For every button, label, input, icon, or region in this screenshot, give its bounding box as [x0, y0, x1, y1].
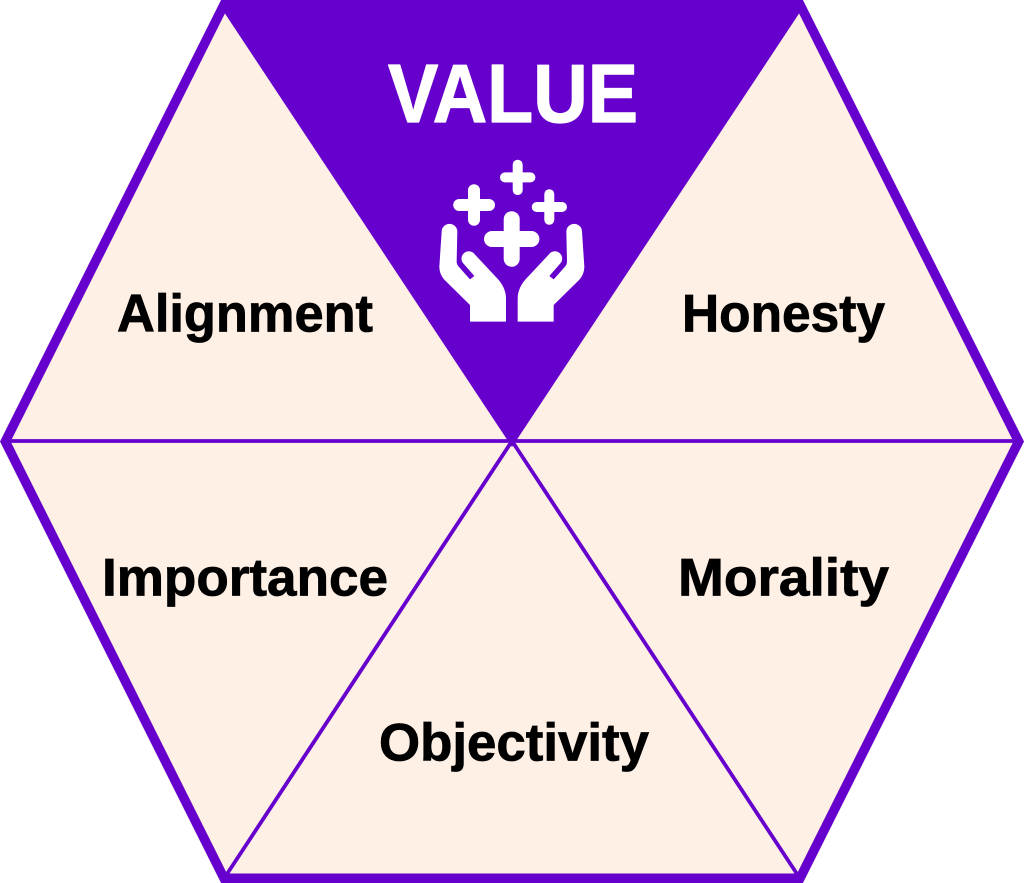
- icon: plus right: [537, 194, 562, 220]
- icon: hands with plus signs: [439, 165, 584, 322]
- label: Importance: Importance: [102, 548, 388, 608]
- inner divider lines: [5, 441, 1019, 877]
- heading: VALUE: VALUE: [388, 47, 638, 140]
- label: Morality: Morality: [678, 548, 890, 608]
- label: Objectivity: Objectivity: [379, 714, 650, 772]
- top triangle panel: value: [221, 4, 803, 447]
- icon: right hand: [518, 224, 584, 322]
- icon: plus centre: [492, 219, 531, 259]
- label: Honesty: Honesty: [682, 284, 886, 344]
- icon: plus left: [459, 190, 489, 220]
- icon: left hand: [439, 224, 506, 322]
- icon: plus top: [505, 165, 530, 190]
- label: Alignment: Alignment: [117, 284, 373, 344]
